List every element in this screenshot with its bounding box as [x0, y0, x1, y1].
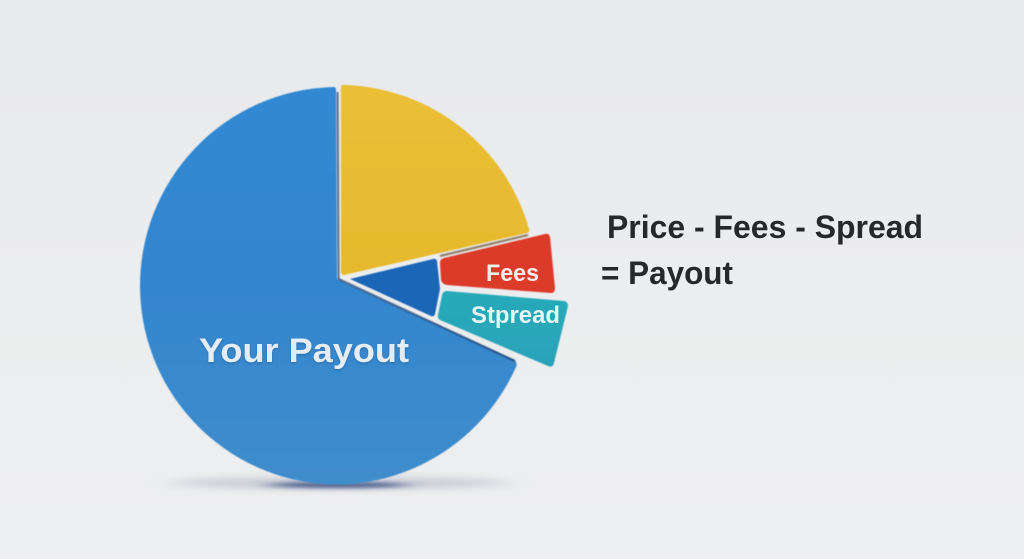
slice: yellow share [341, 85, 529, 275]
slice: your payout [140, 87, 517, 485]
label: fees: Fees [486, 260, 539, 287]
formula line 1: Price - Fees - Spread [607, 209, 923, 245]
label: your payout: Your Payout [199, 332, 409, 370]
slice: fees [440, 234, 555, 293]
ground shadow [170, 477, 510, 489]
slice: dark blue share [350, 259, 440, 316]
formula text [601, 209, 923, 291]
formula line 2: = Payout [601, 255, 733, 291]
pie chart [140, 85, 568, 489]
dark edge between slices [338, 92, 515, 361]
shadow under yellow slice [440, 235, 528, 256]
label: spread: Stpread [471, 302, 560, 329]
slice: spread [438, 291, 568, 367]
